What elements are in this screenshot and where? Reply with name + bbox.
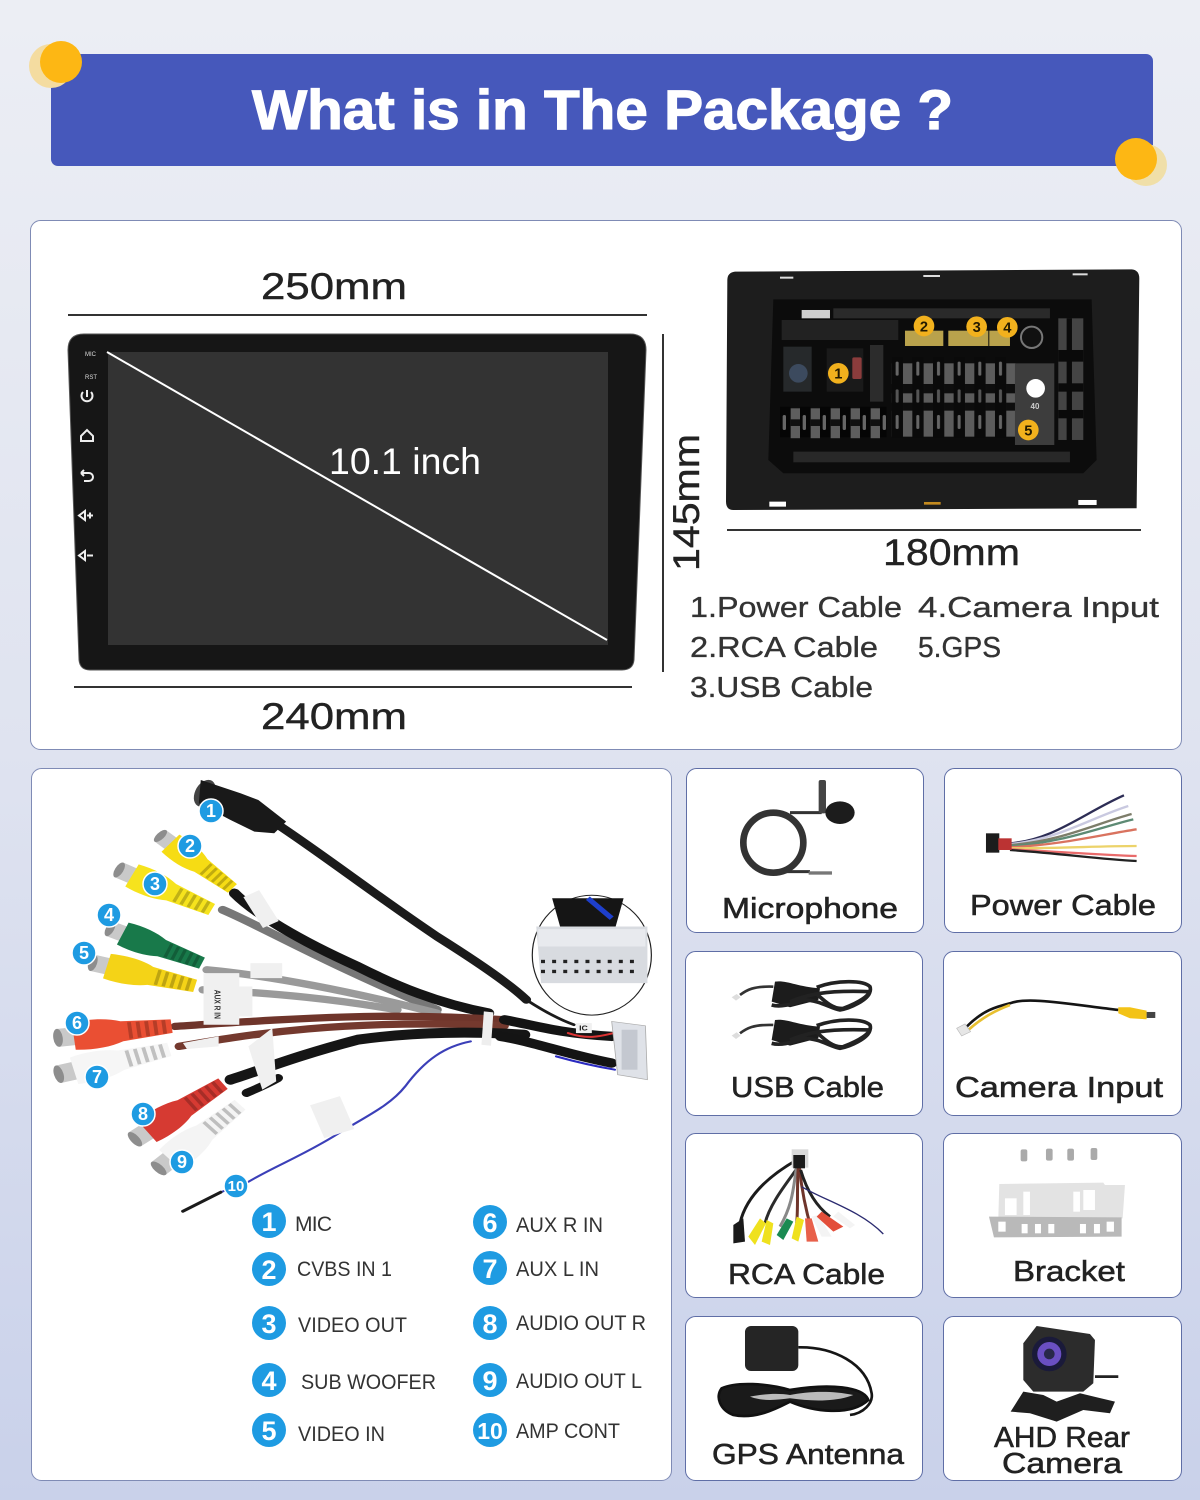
icon: camera input cable <box>957 1001 1155 1036</box>
card: GPS antenna: GPS Antenna <box>712 1439 905 1471</box>
width line 240mm: 240mm <box>261 696 407 737</box>
pin legend: 1 <box>261 1207 277 1237</box>
pin legend: VIDEO IN <box>298 1423 385 1446</box>
panel: dimensions <box>30 220 1182 750</box>
pin legend: 5 <box>261 1416 277 1446</box>
head unit rear view <box>726 269 1139 510</box>
card: camera input: Camera Input <box>955 1072 1163 1104</box>
connector markers: 3 <box>973 320 981 336</box>
connector markers <box>828 316 1039 440</box>
pin legend: 2 <box>261 1255 277 1285</box>
screen size label: 10.1 inch <box>329 441 481 482</box>
card: RCA cable: RCA Cable <box>728 1259 885 1291</box>
banner bar <box>51 54 1153 166</box>
connector markers: 2 <box>920 319 928 335</box>
panel background <box>30 220 1182 750</box>
numbered badges on plugs: 4 <box>104 905 114 925</box>
title banner <box>29 41 1167 186</box>
connector detail circle <box>532 895 651 1015</box>
height line 145mm: 145mm <box>666 434 707 571</box>
connector list: 5.GPS <box>918 632 1001 664</box>
labels on wires: AUX R IN <box>213 990 222 1019</box>
pin legend: AUX L IN <box>516 1258 599 1281</box>
icon: USB cables <box>732 981 870 1048</box>
pin legend: VIDEO OUT <box>298 1314 407 1337</box>
main connector <box>612 1021 647 1080</box>
pin legend: AUDIO OUT L <box>516 1370 642 1393</box>
panel: RCA cable diagram <box>32 768 672 1480</box>
card: power cable <box>944 768 1182 932</box>
pin legend: 7 <box>482 1254 498 1284</box>
button icons: MIC <box>85 352 97 358</box>
connector markers: 1 <box>834 367 842 383</box>
numbered badges on plugs: 1 <box>206 801 216 821</box>
pin legend: AUDIO OUT R <box>516 1312 646 1335</box>
width line 250mm: 250mm <box>261 266 407 307</box>
icon: rear camera <box>1011 1326 1118 1422</box>
card: GPS antenna <box>686 1316 922 1480</box>
numbered badges on plugs: 3 <box>150 874 160 894</box>
pin legend: 10 <box>477 1418 503 1444</box>
icon: GPS antenna <box>719 1326 872 1416</box>
button icons: RST <box>85 375 97 381</box>
icon: RCA cable <box>733 1149 883 1245</box>
numbered badges on plugs: 8 <box>138 1104 148 1124</box>
decorative dot top left <box>29 41 82 88</box>
pin legend: MIC <box>295 1213 332 1236</box>
mic jack <box>190 777 286 833</box>
numbered badges on plugs: 5 <box>79 943 89 963</box>
icon: power cable <box>986 795 1137 861</box>
pin legend: AUX R IN <box>516 1214 603 1237</box>
width line 180mm: 180mm <box>883 532 1020 573</box>
plugs <box>50 825 252 1181</box>
icon: bracket and screws <box>989 1148 1125 1237</box>
card: microphone <box>686 768 924 932</box>
card: RCA cable <box>686 1134 922 1298</box>
wiring harness illustration <box>50 777 651 1211</box>
pin legend: 4 <box>261 1366 277 1396</box>
card: AHD rear camera <box>944 1316 1182 1480</box>
connector markers: 4 <box>1003 321 1012 337</box>
card: AHD rear camera: AHD Rear <box>994 1422 1130 1454</box>
numbered badges on plugs: 6 <box>72 1013 82 1033</box>
connector list <box>690 592 1159 704</box>
connector list: 1.Power Cable <box>690 592 902 624</box>
connector list: 3.USB Cable <box>690 672 873 704</box>
decorative dot bottom right <box>1115 138 1167 186</box>
head unit rear view: 40 <box>1031 402 1040 411</box>
title: What is in The Package ? <box>252 78 953 141</box>
pin legend: AMP CONT <box>516 1420 620 1443</box>
pin legend: SUB WOOFER <box>301 1371 436 1394</box>
head unit front screen <box>68 334 646 670</box>
pin legend <box>252 1204 646 1447</box>
card: USB cable: USB Cable <box>731 1072 884 1104</box>
labels on wires <box>183 890 592 1138</box>
panel background <box>32 768 672 1480</box>
connector list: 4.Camera Input <box>918 592 1159 624</box>
cable tie <box>481 1011 493 1046</box>
connector list: 2.RCA Cable <box>690 632 878 664</box>
numbered badges on plugs <box>65 799 248 1198</box>
numbered badges on plugs: 7 <box>92 1067 102 1087</box>
pin legend: 3 <box>261 1309 277 1339</box>
numbered badges on plugs: 10 <box>228 1178 244 1195</box>
labels on wires: IC <box>579 1024 588 1033</box>
card: camera input <box>944 952 1182 1116</box>
icon: microphone <box>743 780 855 875</box>
card: power cable: Power Cable <box>970 890 1156 922</box>
pin legend: 9 <box>482 1366 498 1396</box>
card: USB cable <box>686 952 922 1116</box>
pin legend: CVBS IN 1 <box>297 1258 392 1281</box>
button icons <box>79 352 97 560</box>
connector markers: 5 <box>1024 423 1032 439</box>
numbered badges on plugs: 2 <box>185 836 195 856</box>
card: microphone: Microphone <box>722 893 898 925</box>
card: bracket <box>944 1134 1182 1298</box>
pin legend: 8 <box>482 1309 498 1339</box>
pin legend: 6 <box>482 1208 498 1238</box>
card: AHD rear camera: Camera <box>1002 1448 1123 1480</box>
numbered badges on plugs: 9 <box>177 1152 187 1172</box>
card: bracket: Bracket <box>1013 1256 1125 1288</box>
